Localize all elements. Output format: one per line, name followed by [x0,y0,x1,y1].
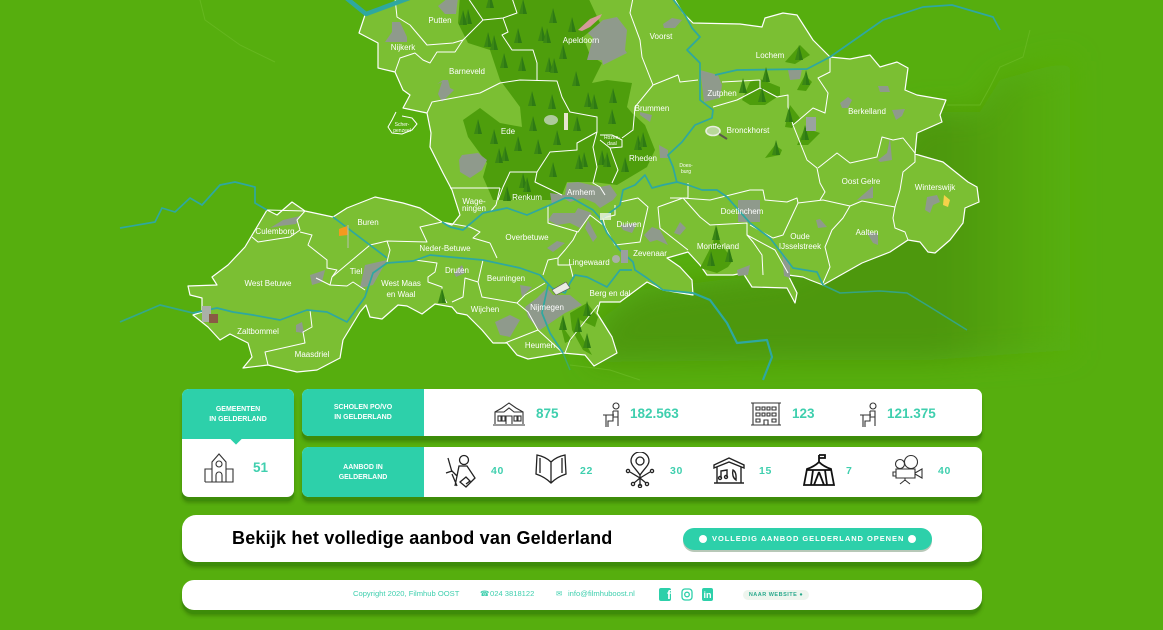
municipality labels: Renkum [512,193,542,202]
map of Gelderland [120,0,1030,380]
panel: scholen [302,389,982,436]
municipality labels: Heumen [525,341,555,350]
panel header: gemeenten in Gelderland [182,389,294,439]
municipality labels: Brummen [635,104,669,113]
municipality labels: Culemborg [255,227,295,236]
landmark: windmill Apeldoorn [578,14,602,31]
urban areas [270,0,940,337]
icon: teacher [446,454,476,488]
icon: film camera [892,455,923,484]
button icon right [908,535,916,543]
number: 40: 40 [491,465,504,477]
municipality labels: Beuningen [487,274,525,283]
municipality labels: Duiven [617,220,641,229]
number: 182.563: 182.563 [630,406,679,421]
icon: facebook: f [667,588,671,602]
email icon: ✉ [556,589,562,598]
municipality labels [237,16,956,359]
municipality labels: Buren [357,218,379,227]
landmark: castle Berkelland [806,117,816,131]
municipality labels: West Betuwe [245,279,292,288]
municipality labels: Berkelland [848,107,886,116]
icon: linkedin [702,588,713,601]
link: naar website: NAAR WEBSITE ● [749,592,803,598]
number: 123: 123 [792,406,815,421]
icon: culture house with music [713,457,745,484]
icon: open book [535,454,567,484]
municipality labels: Putten [428,16,452,25]
municipality labels: Rheden [629,154,657,163]
button icon left [699,535,707,543]
municipality labels: Neder-Betuwe [419,244,471,253]
municipality labels: Oude [790,232,810,241]
icon: circus tent [803,454,835,486]
landmark: Arnhem bridge [600,213,611,220]
icon: map pin network [626,452,654,488]
number: 121.375: 121.375 [887,406,936,421]
landmark: tower Ede [544,113,568,130]
municipality labels: Tiel [350,267,363,276]
icon: primary school [493,402,525,426]
municipality labels: Does- [679,163,693,169]
heading: Bekijk het volledige aanbod van Gelderland [232,528,613,548]
forest: Veluwe [458,0,820,355]
panel header: aanbod in Gelderland [302,447,424,497]
municipality labels: Wijchen [471,305,499,314]
municipality labels: en Waal [386,290,416,299]
panel: gemeenten [182,389,294,497]
municipality labels: Bronckhorst [727,126,770,135]
municipality labels: Lingewaard [568,258,610,267]
municipality labels: Wage- [462,197,486,206]
municipality labels: Aalten [856,228,878,237]
button label: VOLLEDIG AANBOD GELDERLAND OPENEN [712,534,904,543]
panel header: scholen PO/VO: IN GELDERLAND [334,414,392,421]
municipality labels: Berg en dal [590,289,631,298]
municipality labels: Voorst [650,32,673,41]
municipality labels: IJsselstreek [779,242,822,251]
municipal borders [252,0,915,365]
municipality labels: Rozen- [604,135,620,141]
municipality labels: Arnhem [567,188,595,197]
panel header: aanbod in Gelderland: GELDERLAND [339,474,387,481]
panel header: scholen PO/VO [302,389,424,436]
email: info@filmhuboost.nl [568,589,635,598]
number: 15: 15 [759,465,772,477]
municipality labels: ningen [462,204,486,213]
number: 22: 22 [580,465,593,477]
phone icon: ☎ [480,589,489,598]
municipality labels: daal [607,141,617,147]
landmark: orange flag Buren [339,225,348,248]
municipality labels: Barneveld [449,67,485,76]
landmark: Winterswijk flag [943,195,950,207]
panel: aanbod [302,447,982,497]
municipality labels: burg [681,169,691,175]
number: 875: 875 [536,406,559,421]
landmark: loupe Bronckhorst [706,126,727,139]
copyright: Copyright 2020, Filmhub OOST [353,589,459,598]
municipality labels: Druten [445,266,469,275]
municipality labels: Nijkerk [391,43,416,52]
landmarks on the map [202,14,950,323]
number: 51: 51 [253,460,268,475]
municipality labels: Zevenaar [633,249,667,258]
panel header: aanbod in Gelderland: AANBOD IN [343,464,383,471]
number: 7: 7 [846,465,852,477]
municipality labels: Scher- [395,122,410,128]
municipality labels: Zutphen [707,89,737,98]
icon: facebook [659,588,671,601]
icon: pupil at desk [603,402,620,427]
number: 40: 40 [938,465,951,477]
municipality labels: Maasdriel [295,350,330,359]
phone: 024 3818122 [490,589,534,598]
landmark: bridge Nijmegen [552,282,570,295]
panel: banner [182,515,982,562]
municipality labels: Winterswijk [915,183,956,192]
municipality labels: Nijmegen [530,303,564,312]
button [683,528,932,550]
caret [230,433,242,445]
icon: secondary school [751,402,781,426]
municipality labels: penzeel [393,128,411,134]
icon: instagram [681,588,693,601]
municipality labels: West Maas [381,279,421,288]
municipality labels: Lochem [756,51,785,60]
rivers [193,0,830,353]
panel header: gemeenten in Gelderland: GEMEENTEN [216,406,260,413]
icon: student at desk [860,402,876,427]
municipality labels: Ede [501,127,516,136]
icon: town hall [204,453,234,482]
municipality labels: Zaltbommel [237,327,279,336]
municipality labels: Oost Gelre [842,177,881,186]
icon: linkedin: in [704,590,712,600]
panel header: gemeenten in Gelderland: IN GELDERLAND [209,416,267,423]
landmark: castle Zaltbommel [202,306,218,323]
land: province of Gelderland [188,0,979,372]
municipality labels: Montferland [697,242,739,251]
number: 30: 30 [670,465,683,477]
landmark: Lingewaard castle [612,250,628,263]
municipality labels: Doetinchem [721,207,764,216]
municipality labels: Overbetuwe [505,233,549,242]
panel header: scholen PO/VO: SCHOLEN PO/VO [334,404,392,411]
link: naar website [743,590,809,600]
trees [438,0,810,348]
panel: footer [182,580,982,610]
municipality labels: Apeldoorn [563,36,599,45]
